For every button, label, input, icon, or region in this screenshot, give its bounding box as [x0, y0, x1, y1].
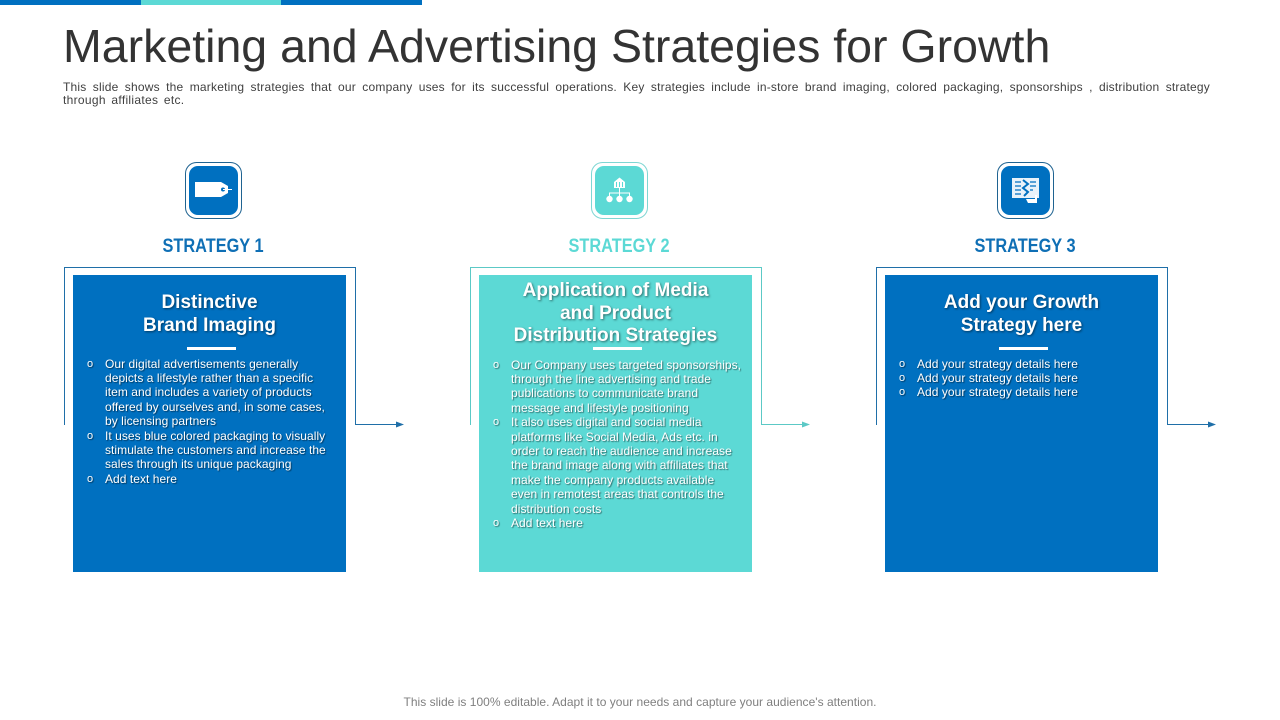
strategy 1 bullet list: offered by ourselves and, in some cases,	[105, 400, 325, 414]
icon: book with hand	[997, 162, 1054, 219]
strategy 2 bullet list: Our Company uses targeted sponsorships,	[511, 358, 741, 372]
strategy 2 bullet list: message and lifestyle positioning	[511, 401, 689, 415]
description text: This slide shows the marketing strategies that our company uses for its successful operations. Key strategies include in-store brand imaging, colored packaging, sponsorships , distribution strategy	[63, 80, 1210, 94]
heading rule	[593, 347, 642, 350]
panel: strategy 2	[479, 275, 752, 572]
connector frame and arrow 3	[876, 267, 1216, 428]
strategy 1 bullet list: o	[87, 358, 93, 370]
strategy 2 bullet list: o	[493, 517, 499, 529]
strategy 3 bullet list	[899, 357, 1079, 400]
strategy 1 bullet list: It uses blue colored packaging to visually	[105, 429, 325, 443]
strategy 1 bullet list: Add text here	[105, 472, 177, 486]
strategy 2 bullet list: the brand image along with affiliates that	[511, 458, 728, 472]
title: Marketing and Advertising Strategies for Growth	[63, 20, 1050, 72]
strategy 1 bullet list	[87, 357, 326, 486]
strategy 2 bullet list: o	[493, 416, 499, 428]
top accent bar	[0, 0, 422, 5]
heading: add your growth strategy: Strategy here	[961, 315, 1082, 336]
strategy 2 bullet list: make the company products available	[511, 473, 714, 487]
strategy 3 bullet list: o	[899, 372, 905, 384]
description text	[63, 80, 1210, 107]
strategy 2 bullet list: distribution costs	[511, 502, 601, 516]
connector frame and arrow 1	[64, 267, 404, 428]
strategy 2 bullet list: platforms like Social Media, Ads etc. in	[511, 430, 718, 444]
strategy 1 bullet list: item and includes a variety of products	[105, 385, 312, 399]
icon: price tag	[185, 162, 242, 219]
heading: distinctive brand imaging: Distinctive	[161, 292, 258, 313]
strategy 1 bullet list: sales through its unique packaging	[105, 457, 292, 471]
strategy 1 bullet list: Our digital advertisements generally	[105, 357, 298, 371]
heading: add your growth strategy: Add your Growth	[944, 292, 1099, 313]
strategy 1 bullet list: stimulate the customers and increase the	[105, 443, 326, 457]
footer note: This slide is 100% editable. Adapt it to your needs and capture your audience's attention.	[403, 695, 877, 709]
heading rule	[999, 347, 1048, 350]
strategy 3 bullet list: o	[899, 386, 905, 398]
strategy 1 bullet list: by licensing partners	[105, 414, 216, 428]
strategy 2 bullet list: publications to communicate brand	[511, 386, 698, 400]
heading: distinctive brand imaging	[143, 292, 277, 338]
label: strategy 1: STRATEGY 1	[162, 236, 264, 257]
heading: application of media: and Product	[560, 302, 671, 324]
label: strategy 2: STRATEGY 2	[568, 236, 670, 257]
strategy 3 bullet list: Add your strategy details here	[917, 385, 1078, 399]
heading: distinctive brand imaging: Brand Imaging	[143, 315, 276, 336]
icon: organisation hierarchy	[591, 162, 648, 219]
strategy 3 bullet list: Add your strategy details here	[917, 371, 1078, 385]
description text: through affiliates etc.	[63, 93, 184, 107]
strategy 3 bullet list: o	[899, 358, 905, 370]
label: strategy 3: STRATEGY 3	[974, 236, 1076, 257]
strategy 2 bullet list: o	[493, 359, 499, 371]
strategy 2 bullet list: Add text here	[511, 516, 583, 530]
connector frame and arrow 2	[470, 267, 810, 428]
strategy 2 bullet list	[493, 358, 742, 530]
panel: strategy 1	[73, 275, 346, 572]
heading: application of media	[514, 280, 719, 348]
strategy 1 bullet list: o	[87, 430, 93, 442]
heading rule	[187, 347, 236, 350]
strategy 3 bullet list: Add your strategy details here	[917, 357, 1078, 371]
strategy 2 bullet list: order to reach the audience and increase	[511, 444, 732, 458]
heading: application of media: Application of Media	[523, 280, 708, 301]
strategy 2 bullet list: through the line advertising and trade	[511, 372, 711, 386]
strategy 2 bullet list: It also uses digital and social media	[511, 415, 702, 429]
heading: add your growth strategy	[944, 292, 1100, 338]
heading: application of media: Distribution Strategies	[514, 325, 717, 346]
panel: strategy 3	[885, 275, 1158, 572]
strategy 2 bullet list: even in remotest areas that controls the	[511, 487, 724, 501]
strategy 1 bullet list: o	[87, 473, 93, 485]
strategy 1 bullet list: depicts a lifestyle rather than a specific	[105, 371, 313, 385]
